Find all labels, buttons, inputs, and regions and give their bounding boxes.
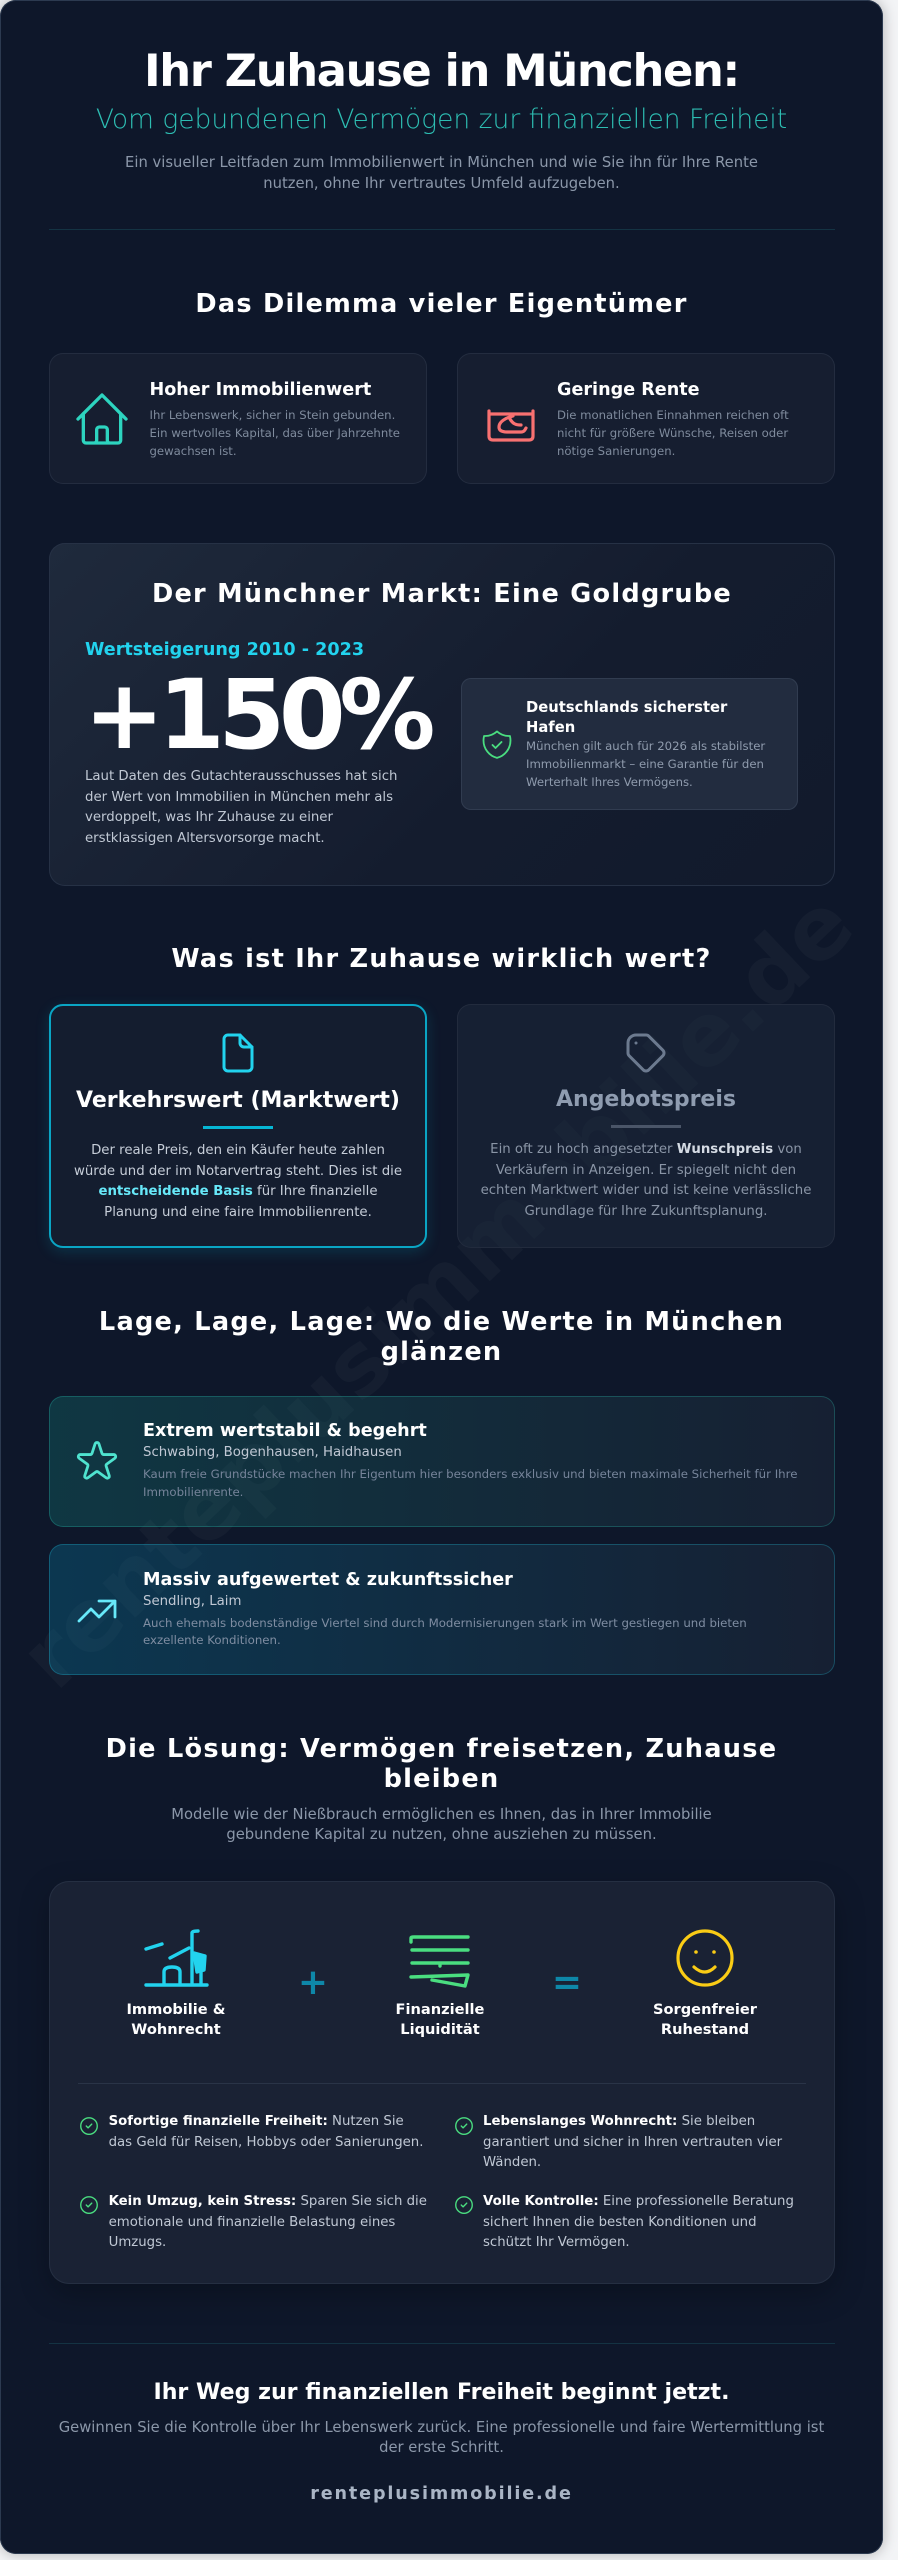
panel: verkehrswert — [49, 1004, 427, 1248]
card text: gewachsen ist. — [150, 444, 237, 458]
icon: document — [222, 1034, 254, 1072]
big number: +150% — [84, 659, 429, 771]
market heading: Der Münchner Markt: Eine Goldgrube — [152, 579, 732, 609]
icon: shield — [482, 730, 512, 759]
heading: loesung: Die Lösung: Vermögen freisetzen, Zuhause — [106, 1734, 777, 1764]
benefit: kontrolle — [455, 2194, 794, 2250]
benefit text — [483, 2114, 782, 2170]
intro: loesung: Modelle wie der Nießbrauch ermöglichen es Ihnen, das in Ihrer Immobilie — [171, 1806, 712, 1822]
icon: cash — [487, 409, 535, 442]
card text: Ihr Lebenswerk, sicher in Stein gebunden. — [150, 408, 395, 422]
benefit text — [109, 2194, 427, 2250]
icon: smile — [676, 1929, 734, 1987]
panel: aufgewertet — [49, 1544, 835, 1675]
subtitle: Vom gebundenen Vermögen zur finanziellen Freiheit — [96, 104, 787, 135]
stat text — [85, 769, 398, 846]
icon: tag — [626, 1034, 666, 1072]
benefit text — [109, 2114, 423, 2150]
benefit text: Lebenslanges Wohnrecht: Sie bleiben — [483, 2114, 755, 2129]
heading: loesung: bleiben — [384, 1764, 499, 1794]
panel: solution — [49, 1881, 835, 2284]
benefit: wohnrecht — [455, 2114, 782, 2170]
area text: Auch ehemals bodenständige Viertel sind durch Modernisierungen stark im Wert gestiegen und bieten — [143, 1616, 747, 1630]
card text — [150, 408, 400, 458]
benefit text — [483, 2194, 794, 2250]
icon: check — [455, 2117, 473, 2135]
intro: loesung: gebundene Kapital zu nutzen, ohne ausziehen zu müssen. — [226, 1826, 657, 1843]
icon: house with pole — [144, 1929, 209, 1987]
price text — [481, 1142, 811, 1218]
benefit text: Wänden. — [483, 2155, 541, 2170]
icon: cash stack — [409, 1935, 470, 1988]
label: ruhestand: Sorgenfreier — [653, 2001, 757, 2018]
intro text — [125, 154, 758, 192]
heading: lage: glänzen — [381, 1337, 502, 1367]
callout text: München gilt auch für 2026 als stabilster — [526, 739, 765, 753]
benefit text: garantiert und sicher in Ihren vertrauten vier — [483, 2134, 782, 2150]
card text: nötige Sanierungen. — [557, 444, 675, 458]
label: immobilie: Wohnrecht — [131, 2021, 221, 2038]
price title: Angebotspreis — [556, 1087, 736, 1112]
equals sign: = — [552, 1962, 582, 2002]
intro text: Ein visueller Leitfaden zum Immobilienwert in München und wie Sie ihn für Ihre Rente — [125, 154, 758, 171]
icon: check — [455, 2196, 473, 2214]
footer — [49, 2343, 835, 2504]
value text: entscheidende Basis für Ihre finanzielle — [98, 1184, 378, 1199]
stat text: der Wert von Immobilien in München mehr als — [85, 790, 393, 804]
benefit: freiheit — [80, 2114, 423, 2150]
callout text: Immobilienmarkt – eine Garantie für den — [526, 757, 764, 771]
label: liquiditaet: Finanzielle — [396, 2001, 484, 2018]
title: Ihr Zuhause in München: — [144, 44, 739, 96]
panel: angebotspreis — [457, 1004, 835, 1248]
stat text: erstklassigen Altersvorsorge macht. — [85, 830, 325, 846]
area title: Massiv aufgewertet & zukunftssicher — [143, 1570, 513, 1590]
card text: Die monatlichen Einnahmen reichen oft — [557, 408, 789, 422]
watermark: renteplusimmobilie.de — [0, 873, 873, 1708]
benefit text: Volle Kontrolle: Eine professionelle Beratung — [483, 2194, 794, 2209]
price text: Verkäufern in Anzeigen. Er spiegelt nicht den — [496, 1162, 796, 1178]
panel: geringe rente — [457, 353, 835, 484]
callout title: Hafen — [526, 719, 575, 736]
value text: würde und der im Notarvertrag steht. Dies ist die — [74, 1164, 402, 1178]
callout: sicherer hafen — [461, 678, 798, 810]
stat text: Laut Daten des Gutachterausschusses hat sich — [85, 769, 398, 784]
panel: market — [49, 543, 835, 886]
card title: Geringe Rente — [557, 380, 700, 400]
heading: loesung — [106, 1734, 777, 1794]
icon: star — [76, 1441, 118, 1480]
heading: wert: Was ist Ihr Zuhause wirklich wert? — [171, 944, 712, 974]
price text: Grundlage für Ihre Zukunftsplanung. — [524, 1204, 768, 1218]
intro: loesung — [171, 1806, 712, 1843]
accent bar — [203, 1126, 273, 1128]
heading: lage: Lage, Lage, Lage: Wo die Werte in München — [99, 1307, 784, 1337]
label: immobilie — [126, 2001, 226, 2038]
area text — [143, 1467, 797, 1499]
card text: Ein wertvolles Kapital, das über Jahrzehnte — [150, 426, 400, 440]
callout title: Deutschlands sicherster — [526, 698, 727, 716]
heading: lage — [99, 1307, 784, 1367]
heading: dilemma: Das Dilemma vieler Eigentümer — [195, 288, 688, 318]
card text: nicht für größere Wünsche, Reisen oder — [557, 426, 788, 440]
panel: wertstabil — [49, 1396, 835, 1527]
panel: hoher immobilienwert — [49, 353, 427, 484]
divider bar — [611, 1124, 681, 1128]
value title: Verkehrswert (Marktwert) — [76, 1088, 400, 1113]
label: ruhestand — [653, 2001, 757, 2038]
stat label: Wertsteigerung 2010 - 2023 — [85, 640, 364, 660]
callout text — [526, 739, 766, 789]
benefit: umzug — [80, 2194, 427, 2250]
area text: Immobilienrente. — [143, 1485, 243, 1499]
value text — [74, 1143, 402, 1220]
header — [96, 44, 787, 192]
benefit text: Umzugs. — [109, 2235, 166, 2250]
area text — [143, 1616, 747, 1647]
value text: Planung und eine faire Immobilienrente. — [104, 1204, 372, 1220]
label: immobilie: Immobilie & — [126, 2001, 226, 2018]
icon: house — [76, 393, 128, 445]
icon: trend arrow — [78, 1600, 116, 1622]
benefit text: Kein Umzug, kein Stress: Sparen Sie sich die — [109, 2194, 427, 2209]
footer text — [0, 2418, 883, 2459]
stat text: verdoppelt, was Ihr Zuhause zu einer — [85, 810, 333, 825]
area title: Extrem wertstabil & begehrt — [143, 1421, 427, 1441]
benefit text: schützt Ihr Vermögen. — [483, 2235, 630, 2250]
benefit text: Sofortige finanzielle Freiheit: Nutzen Sie — [109, 2114, 404, 2129]
plus sign: + — [298, 1962, 328, 2002]
callout text: Werterhalt Ihres Vermögens. — [526, 775, 693, 789]
website: renteplusimmobilie.de — [310, 2484, 573, 2504]
footer text: Gewinnen Sie die Kontrolle über Ihr Lebenswerk zurück. Eine professionelle und faire Wertermittlung ist — [59, 2418, 824, 2436]
icon: check — [80, 2117, 98, 2135]
callout title — [526, 698, 728, 736]
label: liquiditaet: Liquidität — [400, 2021, 480, 2038]
footer title: Ihr Weg zur finanziellen Freiheit beginnt jetzt. — [153, 2379, 730, 2405]
area text: exzellente Konditionen. — [143, 1633, 281, 1647]
price text: echten Marktwert wider und ist keine verlässliche — [481, 1183, 811, 1198]
area names: Schwabing, Bogenhausen, Haidhausen — [143, 1445, 402, 1460]
card title: Hoher Immobilienwert — [150, 380, 371, 400]
intro text: nutzen, ohne Ihr vertrautes Umfeld aufzugeben. — [263, 175, 620, 192]
card text — [557, 408, 789, 458]
area text: Kaum freie Grundstücke machen Ihr Eigentum hier besonders exklusiv und bieten maximale Sicherheit für Ihre — [143, 1467, 797, 1481]
label: ruhestand: Ruhestand — [661, 2021, 749, 2038]
icon: check — [80, 2196, 98, 2214]
area names: Sendling, Laim — [143, 1594, 241, 1609]
benefit text: das Geld für Reisen, Hobbys oder Sanierungen. — [109, 2134, 423, 2150]
benefit text: emotionale und finanzielle Belastung eines — [109, 2214, 395, 2230]
label: liquiditaet — [396, 2001, 484, 2038]
price text: Ein oft zu hoch angesetzter Wunschpreis von — [490, 1142, 802, 1157]
footer text: der erste Schritt. — [379, 2439, 504, 2456]
value text: Der reale Preis, den ein Käufer heute zahlen — [91, 1143, 385, 1158]
benefit text: sichert Ihnen die besten Konditionen und — [483, 2214, 757, 2230]
